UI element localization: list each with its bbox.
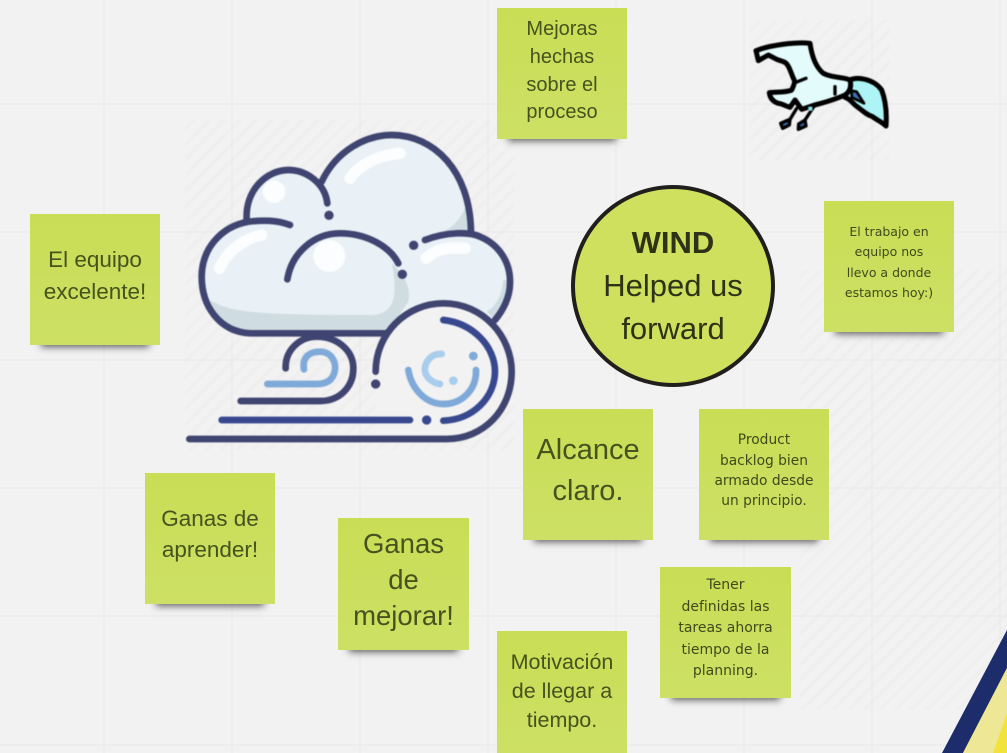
sticky note: mejoras: hechas — [530, 46, 594, 68]
sticky note: trabajo en equipo: El trabajo en — [849, 224, 929, 238]
sticky note: tareas definidas: tiempo de la — [682, 642, 769, 658]
sticky note: ganas de mejorar: de — [388, 564, 419, 594]
sticky note: mejoras: proceso — [526, 101, 598, 123]
sticky note: trabajo en equipo — [824, 201, 954, 332]
sticky note: ganas de mejorar: mejorar! — [353, 600, 454, 630]
sticky note: tareas definidas — [660, 567, 791, 698]
sticky note: motivacion: tiempo. — [527, 708, 597, 732]
corner decoration — [942, 630, 1007, 753]
sticky note: tareas definidas: definidas las — [681, 599, 770, 615]
sticky note: product backlog: armado desde — [714, 473, 814, 489]
sticky note: mejoras — [497, 8, 627, 139]
circle: WIND helped us forward — [571, 185, 775, 387]
sticky note: motivacion — [497, 631, 627, 753]
sticky note: trabajo en equipo: llevo a donde — [847, 264, 931, 280]
sticky note: mejoras: sobre el — [526, 74, 598, 96]
circle: WIND helped us forward: forward — [621, 311, 725, 346]
sticky note: ganas de aprender: Ganas de — [161, 506, 259, 531]
circle: WIND helped us forward: WIND — [632, 225, 714, 260]
cloud body — [202, 135, 510, 333]
sticky note: mejoras: Mejoras — [526, 18, 598, 40]
sticky note: ganas de aprender: aprender! — [162, 537, 258, 562]
circle: WIND helped us forward: Helped us — [603, 268, 743, 303]
sticky note: tareas definidas: Tener — [706, 577, 744, 593]
sticky note: ganas de aprender — [145, 473, 275, 604]
sticky note: tareas definidas: planning. — [693, 663, 758, 679]
sticky note: motivacion: de llegar a — [512, 679, 612, 703]
sticky note: motivacion: Motivación — [511, 650, 613, 674]
sticky note: trabajo en equipo: estamos hoy:) — [845, 285, 933, 300]
sticky note: alcance claro — [523, 409, 653, 540]
sticky note: product backlog — [699, 409, 829, 540]
sticky note: alcance claro: Alcance — [536, 434, 640, 466]
sticky note: equipo excelente: excelente! — [44, 278, 146, 304]
sticky note: tareas definidas: tareas ahorra — [678, 620, 773, 636]
wind swirls — [189, 303, 512, 439]
sticky note: equipo excelente: El equipo — [48, 246, 142, 272]
sticky note: alcance claro: claro. — [553, 474, 623, 506]
sticky note: equipo excelente — [30, 214, 160, 345]
sticky note: ganas de mejorar: Ganas — [363, 528, 444, 558]
sticky note: trabajo en equipo: equipo nos — [855, 244, 923, 259]
icon: seagull — [752, 40, 890, 132]
sticky note: product backlog: Product — [738, 432, 790, 448]
illustration: cloud and wind — [185, 130, 516, 444]
sticky note: product backlog: un principio. — [721, 493, 807, 509]
sticky note: product backlog: backlog bien — [720, 453, 808, 469]
sticky note: ganas de mejorar — [338, 518, 469, 650]
